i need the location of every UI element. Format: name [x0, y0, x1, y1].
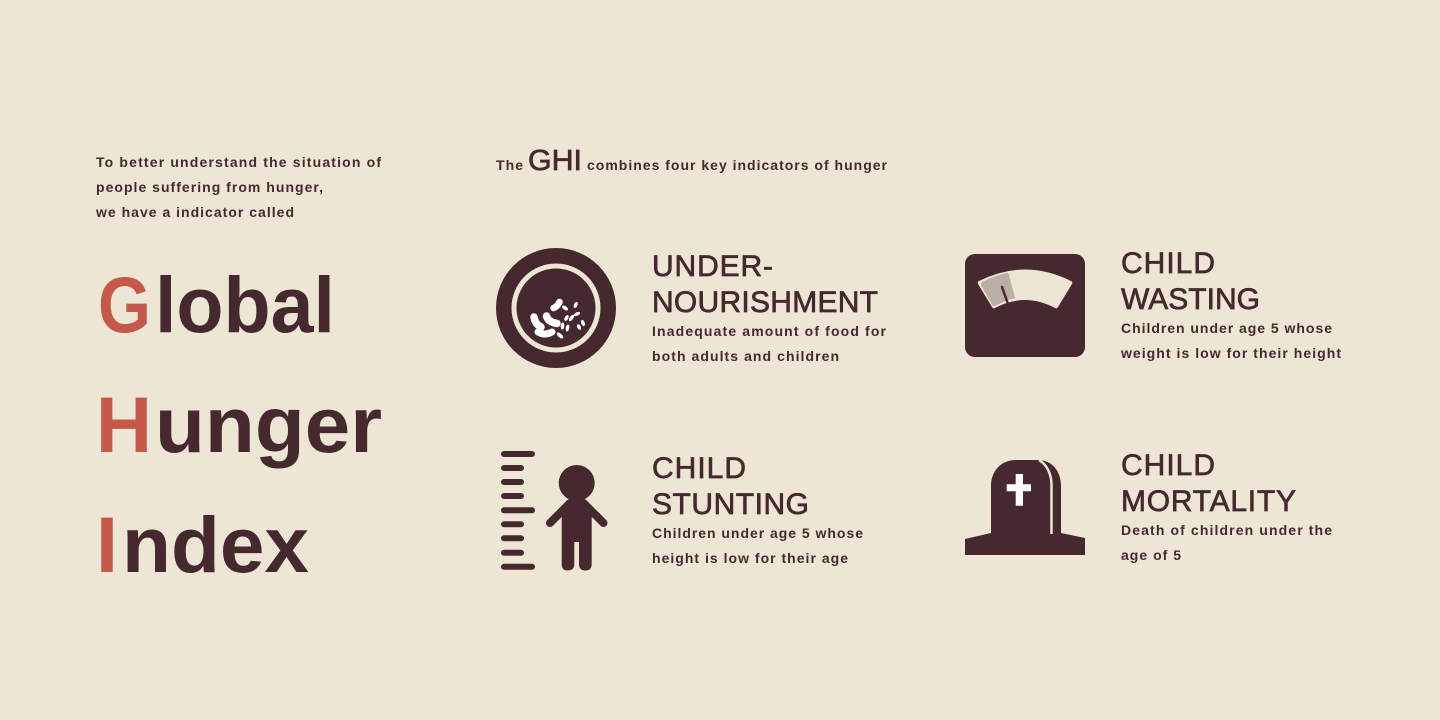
title word: Global: lobal — [155, 260, 335, 349]
text: child stunting: height is low for their age — [652, 550, 848, 566]
icon: gravestone — [965, 460, 1085, 555]
text: child wasting: WASTING — [1121, 283, 1260, 316]
icon: plate with beans — [496, 248, 616, 368]
text: undernourishment: both adults and children — [652, 348, 839, 364]
text: child mortality: Death of children under the — [1121, 522, 1332, 538]
text: child wasting — [1120, 247, 1341, 361]
title word: Index: ndex — [122, 500, 309, 589]
intro text: To better understand the situation of — [96, 154, 381, 170]
text: child mortality: MORTALITY — [1121, 485, 1296, 518]
heading: GHI combines four key indicators: The — [496, 157, 523, 173]
text: child stunting: CHILD — [652, 452, 746, 485]
text: child stunting: STUNTING — [652, 488, 809, 521]
text: child mortality — [1121, 449, 1332, 563]
icon: child and height ruler — [504, 454, 604, 570]
text: child mortality: age of 5 — [1121, 547, 1181, 563]
cross — [1007, 474, 1031, 506]
height ruler — [504, 454, 532, 567]
heading: GHI combines four key indicators: combines four key indicators of hunger — [587, 157, 888, 173]
title word: Global: G — [98, 260, 151, 349]
text: child wasting: CHILD — [1121, 247, 1215, 280]
icon: weighing scale — [965, 254, 1085, 357]
title: Global Hunger Index — [96, 260, 382, 589]
text: undernourishment: Inadequate amount of food for — [652, 323, 887, 339]
child figure — [550, 465, 604, 570]
heading: GHI combines four key indicators: GHI — [528, 145, 582, 177]
text: undernourishment — [652, 250, 887, 364]
text: child mortality: CHILD — [1121, 449, 1215, 482]
text: child wasting: weight is low for their height — [1120, 345, 1341, 361]
intro text: people suffering from hunger, — [96, 179, 323, 195]
title word: Index: I — [96, 500, 118, 589]
text: child stunting — [652, 452, 863, 566]
text: undernourishment: UNDER- — [652, 250, 773, 283]
title word: Hunger: unger — [155, 380, 382, 469]
text: child wasting: Children under age 5 whose — [1121, 320, 1332, 336]
text: undernourishment: NOURISHMENT — [652, 286, 878, 319]
text: child stunting: Children under age 5 whose — [652, 525, 863, 541]
title word: Hunger: H — [96, 380, 152, 469]
intro text: we have a indicator called — [95, 204, 294, 220]
intro text — [95, 154, 381, 220]
heading: GHI combines four key indicators — [496, 145, 888, 177]
